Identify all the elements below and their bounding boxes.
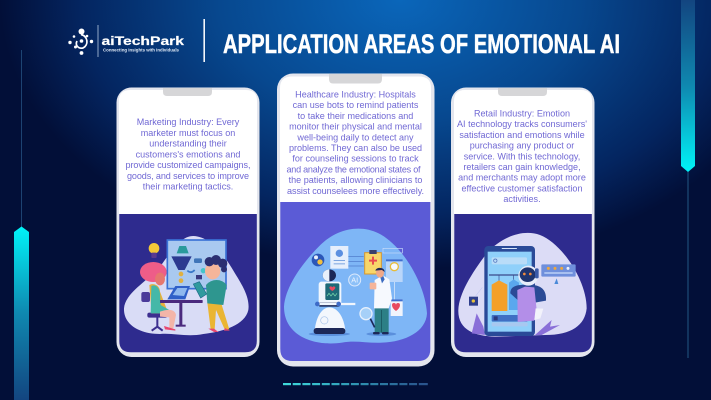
desk: [160, 300, 203, 303]
retail text: and merchants may adopt more: [458, 173, 586, 183]
healthcare text: well-being daily to detect any: [296, 132, 414, 142]
panel: marketing phone: [116, 88, 260, 357]
healthcare text: the patients, allowing clinicians to: [289, 175, 422, 185]
illustration: robot and doctor: [284, 229, 427, 344]
marketing text: Marketing Industry: Every: [137, 117, 240, 127]
retail text: AI technology tracks consumers': [457, 119, 587, 129]
retail text: retailers can gain knowledge,: [463, 162, 581, 172]
logo: Connecting Insights with Individuals: [103, 47, 179, 52]
phone frame: [116, 88, 260, 357]
healthcare text: and analyze the emotional states of: [286, 164, 421, 174]
screen top: [280, 76, 431, 202]
marketing text: [126, 117, 250, 192]
retail text: purchasing any product or: [470, 141, 574, 151]
laptop: [167, 286, 190, 299]
marketing text: provide customized campaigns,: [126, 160, 250, 170]
marketing text: marketer must focus on: [141, 128, 235, 138]
woman: [141, 292, 150, 302]
healthcare text: can use bots to remind patients: [293, 100, 419, 110]
healthcare text: to take their medications and: [298, 111, 413, 121]
screen bottom: [119, 214, 257, 352]
screen bottom: [280, 202, 430, 361]
illustration: marketing team: [124, 236, 249, 335]
robot: [309, 332, 350, 336]
healthcare text: for counseling sessions to track: [292, 154, 419, 164]
notch: [329, 74, 382, 84]
screen bottom: [454, 214, 592, 352]
marketing text: goods, and services to improve: [127, 171, 249, 181]
illustration: robot and doctor: AI: [351, 276, 358, 285]
doctor: [366, 332, 396, 336]
panel: retail phone: [451, 88, 594, 357]
retail text: [457, 108, 587, 204]
retail text: activities.: [503, 194, 541, 204]
screen top: [454, 90, 592, 214]
screen top: [119, 90, 257, 214]
rating card: [541, 264, 576, 277]
logo: [68, 25, 184, 57]
healthcare text: monitor their physical and mental: [289, 122, 422, 132]
phone frame: [451, 88, 594, 357]
healthcare text: Healthcare Industry: Hospitals: [295, 90, 416, 100]
notch: [498, 88, 547, 96]
panel: healthcare phone: [277, 74, 434, 366]
healthcare text: problems. They can also be used: [289, 143, 422, 153]
healthcare text: [286, 90, 424, 196]
robot: [510, 285, 546, 310]
phone frame: [277, 74, 434, 366]
notch: [163, 88, 212, 96]
illustration: shopping robot: [458, 233, 587, 337]
retail text: satisfaction and emotions while: [459, 130, 585, 140]
right glowing bar: [681, 0, 695, 358]
dashed progress line: [283, 383, 428, 385]
marketing text: their marketing tactics.: [143, 182, 233, 192]
retail text: service. With this technology,: [464, 151, 580, 161]
marketing text: customers's emotions and: [136, 149, 240, 159]
man: [207, 299, 229, 329]
logo: aiTechPark: [102, 34, 184, 48]
marketing text: understanding their: [149, 138, 227, 148]
retail text: effective customer satisfaction: [461, 183, 583, 193]
retail text: Retail Industry: Emotion: [474, 108, 570, 118]
left glowing bar: [14, 50, 29, 400]
healthcare text: assist counselees more effectively.: [287, 186, 424, 196]
header divider: [203, 19, 205, 62]
